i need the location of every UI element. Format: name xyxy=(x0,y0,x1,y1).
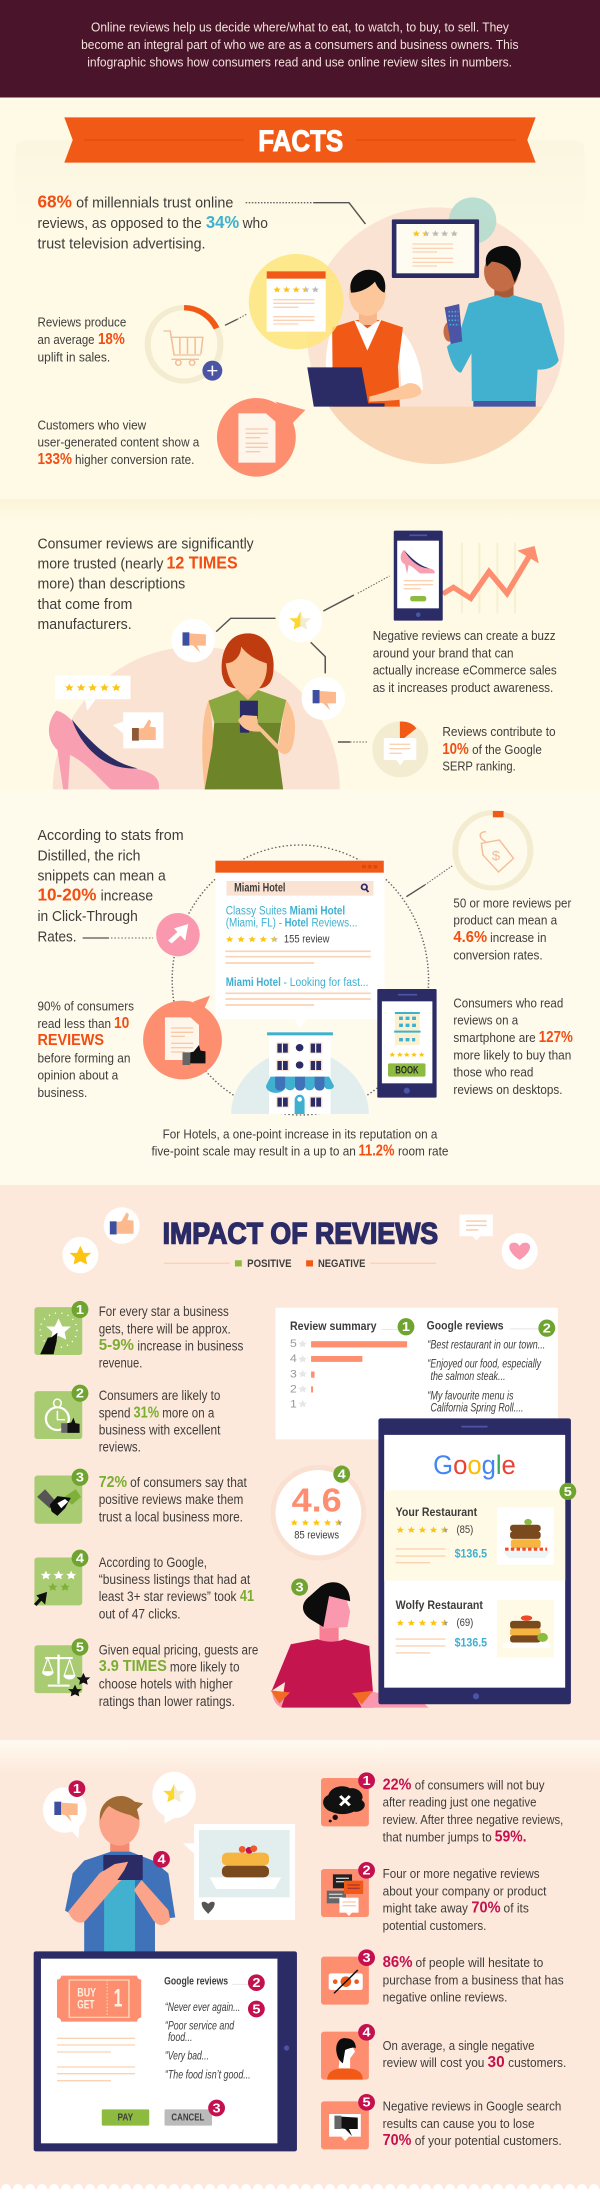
button: cancel: 3 xyxy=(213,2101,221,2115)
bubble: thumbs down: 1 xyxy=(73,1782,81,1796)
coupon: BUY xyxy=(77,1986,96,1999)
item 3: trust local business: of consumers say that xyxy=(130,1476,247,1491)
stat: 133% conversion: higher conversion rate. xyxy=(75,453,194,468)
stat: 11.2% hotels xyxy=(152,1127,448,1159)
stat: 18% uplift: Reviews produce xyxy=(37,316,126,330)
google reviews quotes: the salmon steak... xyxy=(430,1368,505,1383)
connector xyxy=(225,319,237,325)
item 5: 70% potential customers: 70% xyxy=(383,2132,412,2149)
item 4: star listings clicks: 4 xyxy=(76,1550,84,1565)
item 2: spend more: business with excellent xyxy=(99,1423,220,1438)
item 3: trust local business xyxy=(34,1469,247,1525)
stat: 127% smartphone: smartphone are xyxy=(453,1031,536,1046)
section: impact of reviews xyxy=(34,1207,576,1710)
stat: 11.2% hotels: five-point scale may result in a up to an xyxy=(152,1145,356,1159)
scalloped bottom edge xyxy=(0,2180,600,2193)
browser: search results: Hotel xyxy=(285,916,308,929)
item 4: star listings clicks: “business listings that had at xyxy=(99,1573,250,1588)
stat: 133% conversion: user-generated content show a xyxy=(37,436,199,450)
icon: thumbs up xyxy=(104,1207,140,1244)
illustration: woman xyxy=(271,1578,429,1708)
item 4: star listings clicks: 41 xyxy=(240,1587,254,1605)
item 2: four or more negative reviews: of its xyxy=(504,1902,529,1916)
item 1: star rating revenue: 5-9% xyxy=(99,1336,134,1354)
heading: impact of reviews: IMPACT OF REVIEWS xyxy=(163,1217,438,1250)
banner: facts xyxy=(64,117,536,163)
stat: 10-20% click through: increase xyxy=(101,888,153,904)
item 4: 30 customers: 30 xyxy=(487,2054,505,2071)
stat: 90% read 10 reviews: before forming an xyxy=(37,1051,130,1066)
reviews list: “Very bad... xyxy=(165,2049,209,2062)
stat: 90% read 10 reviews xyxy=(37,1000,134,1101)
stat: 127% smartphone: reviews on a xyxy=(453,1014,518,1028)
legend xyxy=(164,1256,436,1270)
stat: 68% millennials: reviews, as opposed to the xyxy=(37,215,202,232)
section background: reviews trust xyxy=(0,499,600,521)
browser: search results: Miami Hotel xyxy=(234,881,285,894)
item 5: 70% potential customers xyxy=(321,2094,562,2149)
stat: 10-20% click through: Distilled, the rich xyxy=(37,847,140,864)
stat: 18% uplift: 18% xyxy=(98,331,125,348)
reviews list: “Poor service and xyxy=(165,2019,235,2032)
item 5: equal pricing: more likely to xyxy=(170,1660,240,1675)
stat: 90% read 10 reviews: 10 xyxy=(114,1015,129,1032)
stat: 10-20% click through: snippets can mean a xyxy=(37,868,166,884)
connectors xyxy=(216,618,325,673)
icon: star xyxy=(62,1237,98,1273)
item 3: 86% hesitate: negative online reviews. xyxy=(383,1991,507,2005)
icon: phone with book button xyxy=(377,989,437,1098)
stat: 18% uplift: uplift in sales. xyxy=(37,350,110,365)
google reviews quotes: “Enjoyed our food, especially xyxy=(427,1356,542,1371)
item 1: star rating revenue xyxy=(34,1301,243,1372)
stat: 10-20% click through: in Click-Through xyxy=(37,908,138,925)
google reviews quotes xyxy=(427,1318,555,1414)
stat: 68% millennials: of millennials trust online xyxy=(76,194,233,211)
stat: 127% smartphone: Consumers who read xyxy=(453,996,563,1011)
button: pay: PAY xyxy=(117,2112,133,2123)
rating badge 4.6: 4.6 xyxy=(292,1481,342,1519)
reviews list: 5 xyxy=(252,2002,261,2016)
text: 12 times more trusted: manufacturers. xyxy=(37,616,132,633)
section background: impact of reviews xyxy=(0,1185,600,1740)
text: negative reviews buzz xyxy=(373,629,557,696)
legend: NEGATIVE xyxy=(318,1256,365,1270)
item 2: spend more xyxy=(34,1385,220,1456)
item 3: trust local business: 3 xyxy=(76,1469,84,1485)
result: your restaurant: $136.5 xyxy=(455,1546,487,1560)
item 1: star rating revenue: gets, there will be approx. xyxy=(99,1322,231,1337)
connector xyxy=(83,936,109,940)
stat: 4.6% conversion xyxy=(453,896,571,963)
browser: search results: Miami Hotel xyxy=(226,975,281,989)
reviews list xyxy=(164,1974,265,2081)
item 3: 86% hesitate xyxy=(321,1949,564,2005)
item 2: four or more negative reviews: 70% xyxy=(471,1900,501,1916)
stat: 133% conversion: Customers who view xyxy=(37,418,147,433)
stat: 4.6% conversion: 4.6% xyxy=(453,929,487,946)
result: wolfy restaurant: (69) xyxy=(457,1617,473,1629)
reviews list: Google reviews xyxy=(164,1974,228,1987)
google reviews quotes: Google reviews xyxy=(427,1318,504,1332)
button: pay xyxy=(102,2109,149,2126)
item 2: spend more: more on a xyxy=(162,1406,215,1421)
tablet: google results: 5 xyxy=(564,1484,572,1499)
item 3: 86% hesitate: 3 xyxy=(363,1951,371,1965)
text: 12 times more trusted: that come from xyxy=(37,596,132,613)
item 5: equal pricing: 3.9 TIMES xyxy=(99,1657,167,1675)
stat: 127% smartphone: those who read xyxy=(453,1066,533,1080)
woman xyxy=(202,633,295,789)
man with laptop xyxy=(307,270,423,407)
icon: shopping cart ring xyxy=(148,308,222,381)
button: cancel xyxy=(165,2100,225,2126)
item 2: four or more negative reviews: 2 xyxy=(363,1864,371,1877)
stat: 90% read 10 reviews: opinion about a xyxy=(37,1069,118,1083)
item 5: equal pricing: choose hotels with higher xyxy=(99,1677,233,1692)
item 1: star rating revenue: 1 xyxy=(76,1302,84,1317)
item 5: 70% potential customers: of your potential customers. xyxy=(415,2134,562,2149)
stat: 127% smartphone: 127% xyxy=(539,1029,573,1046)
item 2: spend more: 2 xyxy=(76,1385,84,1401)
review summary bars: 1 xyxy=(402,1319,410,1334)
section: negative reviews xyxy=(34,1772,566,2151)
button: cancel: CANCEL xyxy=(171,2112,205,2123)
stat: 10-20% click through xyxy=(37,827,184,945)
stat: 68% millennials: 34% xyxy=(206,212,239,233)
monitor xyxy=(392,219,479,278)
icon: SERP pie xyxy=(372,721,428,777)
item 2: four or more negative reviews: might take away xyxy=(383,1902,469,1916)
item 1: star rating revenue: revenue. xyxy=(99,1356,142,1372)
text: 12 times more trusted: Consumer reviews are significantly xyxy=(37,535,255,552)
result: your restaurant: Your Restaurant xyxy=(396,1505,478,1519)
stat: 10% SERP xyxy=(442,725,556,774)
gradient top of negative section xyxy=(0,1740,600,1774)
icon: half star circle xyxy=(279,599,322,642)
browser: search results: Miami Hotel xyxy=(290,903,345,917)
reviews list: “Never ever again... xyxy=(165,2000,240,2014)
reviews list: “The food isn’t good... xyxy=(165,2067,251,2081)
google reviews quotes: 2 xyxy=(543,1320,551,1335)
item 4: star listings clicks: According to Google, xyxy=(99,1555,207,1571)
item 1: 22% of consumers: 22% xyxy=(383,1776,412,1793)
item 5: equal pricing xyxy=(34,1638,258,1710)
icon: heart xyxy=(502,1233,538,1270)
legend: POSITIVE xyxy=(247,1256,292,1270)
item 3: trust local business: 72% xyxy=(99,1473,127,1491)
stat: 133% conversion: 133% xyxy=(37,451,72,468)
rating badge 4.6 xyxy=(271,1465,366,1561)
item 2: four or more negative reviews: about your company or product xyxy=(383,1884,546,1899)
review summary bars: 5 xyxy=(290,1338,297,1350)
item 5: equal pricing: 5 xyxy=(76,1639,84,1654)
item 4: 30 customers xyxy=(321,2024,566,2080)
icon: price tag ring: $ xyxy=(492,849,501,863)
item 5: equal pricing: Given equal pricing, guests are xyxy=(99,1643,258,1658)
illustration: man with tablet: 4 xyxy=(157,1853,166,1866)
connector xyxy=(406,885,425,897)
item 2: spend more: spend xyxy=(99,1406,130,1421)
stat: 10% SERP: of the Google xyxy=(472,743,542,758)
text: 12 times more trusted: more trusted (nearly xyxy=(37,555,164,572)
illustration: woman with shoe xyxy=(49,599,345,789)
stat: 18% uplift xyxy=(37,316,126,365)
item 5: 70% potential customers: results can cause you to lose xyxy=(383,2117,535,2132)
stat: 10% SERP: Reviews contribute to xyxy=(442,725,556,740)
result: wolfy restaurant: $136.5 xyxy=(455,1635,487,1649)
review summary bars: Review summary xyxy=(290,1319,377,1333)
item 1: star rating revenue: For every star a business xyxy=(99,1305,229,1320)
connector xyxy=(338,739,350,744)
result: wolfy restaurant xyxy=(396,1598,554,1657)
browser: search results xyxy=(215,860,385,1028)
stat: 4.6% conversion: product can mean a xyxy=(453,914,557,928)
item 2: spend more: reviews. xyxy=(99,1440,141,1456)
item 1: 22% of consumers: 59%. xyxy=(495,1828,527,1845)
stat: 10-20% click through: Rates. xyxy=(37,928,77,945)
header band xyxy=(0,0,600,98)
stat: 90% read 10 reviews: 90% of consumers xyxy=(37,1000,134,1014)
dotted ring xyxy=(172,845,429,1115)
icon: phone with shoe xyxy=(394,531,443,621)
item 1: 22% of consumers: of consumers will not buy xyxy=(415,1778,545,1793)
stat: 4.6% conversion: conversion rates. xyxy=(453,948,543,963)
bubble: thumbs up xyxy=(113,712,163,748)
icon: document bubble xyxy=(217,398,305,477)
stat: 10% SERP: 10% xyxy=(442,741,469,758)
icon: price tag ring xyxy=(455,811,530,888)
browser: search results: (Miami, FL) - xyxy=(226,916,282,929)
stat: 11.2% hotels: 11.2% xyxy=(359,1143,395,1159)
item 4: star listings clicks: out of 47 clicks. xyxy=(99,1607,181,1622)
illustration: man with tablet xyxy=(65,1796,175,1952)
review summary bars: 2 xyxy=(290,1383,297,1395)
intro text xyxy=(81,21,518,70)
item 2: spend more: 31% xyxy=(134,1403,159,1421)
browser: search results: 155 review xyxy=(284,934,330,945)
item 1: 22% of consumers: after reading just one negative xyxy=(383,1796,536,1810)
stat: 11.2% hotels: For Hotels, a one-point increase in its reputation on a xyxy=(163,1127,437,1142)
heading: facts: FACTS xyxy=(258,124,343,158)
shoe xyxy=(49,711,159,789)
item 2: spend more: Consumers are likely to xyxy=(99,1389,220,1404)
illustration: woman: 3 xyxy=(296,1579,304,1594)
stat: 10-20% click through: 10-20% xyxy=(37,885,96,905)
illustration: hotel building xyxy=(231,1032,369,1114)
result: your restaurant xyxy=(384,1490,565,1581)
item 4: star listings clicks xyxy=(34,1550,254,1622)
reviews list: food... xyxy=(168,2030,192,2044)
review summary bars: 1 xyxy=(290,1398,297,1411)
icon: pink arrow circle xyxy=(156,913,200,956)
review summary bars xyxy=(290,1318,414,1411)
reviews list: 2 xyxy=(252,1976,261,1990)
text: 12 times more trusted xyxy=(37,535,255,633)
text: negative reviews buzz: around your brand that can xyxy=(373,646,514,661)
bubble: five stars xyxy=(55,676,130,711)
item 4: 30 customers: customers. xyxy=(508,2056,566,2071)
icon: phone with book button: BOOK xyxy=(395,1063,419,1076)
item 3: 86% hesitate: 86% xyxy=(383,1954,413,1971)
stat: 68% millennials: who xyxy=(242,215,268,232)
stat: 11.2% hotels: room rate xyxy=(398,1145,448,1159)
rating badge 4.6: 85 reviews xyxy=(294,1529,339,1541)
coupon: 1 xyxy=(114,1983,122,2012)
item 3: 86% hesitate: of people will hesitate to xyxy=(416,1956,543,1971)
section: consumer reviews trust xyxy=(37,531,557,789)
item 2: four or more negative reviews xyxy=(321,1862,546,1934)
item 5: equal pricing: ratings than lower ratings. xyxy=(99,1695,235,1710)
man with phone xyxy=(443,246,559,407)
item 1: star rating revenue: increase in business xyxy=(137,1339,243,1354)
bubble: half star xyxy=(152,1772,196,1823)
item 1: 22% of consumers: 1 xyxy=(363,1774,371,1788)
panel: review summary and google reviews xyxy=(276,1308,558,1439)
review summary bars: 3 xyxy=(290,1368,297,1380)
item 3: trust local business: positive reviews make them xyxy=(99,1493,243,1508)
section background: negative xyxy=(0,1740,600,2190)
item 2: four or more negative reviews: potential customers. xyxy=(383,1919,486,1934)
section: facts xyxy=(15,21,585,477)
stat: 10% SERP: SERP ranking. xyxy=(442,760,516,774)
item 3: trust local business: trust a local business more. xyxy=(99,1510,243,1525)
stat: 68% millennials xyxy=(37,192,268,252)
result: your restaurant: (85) xyxy=(457,1524,473,1536)
stat: 68% millennials: trust television advertising. xyxy=(37,235,205,252)
connector xyxy=(246,201,314,205)
stat: 133% conversion xyxy=(37,418,199,468)
coupon: GET xyxy=(77,1997,95,2011)
item 4: 30 customers: review will cost you xyxy=(383,2056,484,2071)
stat: 4.6% conversion: increase in xyxy=(490,931,546,946)
tablet: google results xyxy=(378,1418,576,1704)
google reviews quotes: “My favourite menu is xyxy=(427,1388,514,1402)
item 4: 30 customers: On average, a single negative xyxy=(383,2039,535,2054)
browser: search results: Classy Suites xyxy=(226,903,287,917)
photo card with food xyxy=(183,1824,295,1920)
result: wolfy restaurant: Wolfy Restaurant xyxy=(396,1598,483,1612)
browser: search results: - Looking for fast... xyxy=(284,975,368,989)
google logo text: Google xyxy=(433,1450,516,1480)
item 1: 22% of consumers xyxy=(321,1772,563,1845)
stat: 127% smartphone: reviews on desktops. xyxy=(453,1083,562,1098)
panel behind banner xyxy=(15,140,585,240)
stat: 127% smartphone xyxy=(453,996,573,1098)
item 4: star listings clicks: least 3+ star reviews” took xyxy=(99,1590,237,1605)
stat: 10-20% click through: According to stats from xyxy=(37,827,184,844)
bubble: thumbs down xyxy=(43,1780,86,1838)
icon: document thumbs up bubble xyxy=(143,996,222,1079)
icon: message xyxy=(460,1214,493,1241)
tablet: coupon and reviews xyxy=(34,1951,297,2151)
illustration: two men xyxy=(307,197,564,464)
item 1: 22% of consumers: that number jumps to xyxy=(383,1830,492,1845)
stat: 90% read 10 reviews: REVIEWS xyxy=(37,1032,104,1049)
rating badge 4.6: 4 xyxy=(338,1466,346,1481)
connector xyxy=(323,595,354,611)
text: 12 times more trusted: more) than descriptions xyxy=(37,576,185,592)
item 4: 30 customers: 4 xyxy=(363,2026,371,2039)
section background: snippets xyxy=(0,789,600,1185)
stat: 90% read 10 reviews: business. xyxy=(37,1086,87,1101)
stat: 18% uplift: an average xyxy=(37,333,95,348)
text: 12 times more trusted: 12 TIMES xyxy=(166,553,238,573)
chart: rising zigzag arrow xyxy=(443,543,539,613)
review summary bars: 4 xyxy=(290,1353,297,1365)
google reviews quotes: California Spring Roll.... xyxy=(430,1400,523,1414)
browser: search results: Reviews... xyxy=(311,916,357,929)
icon: thumbs down left xyxy=(171,619,215,662)
coupon xyxy=(57,1976,141,2022)
section: snippets and hotels xyxy=(37,811,573,1159)
item 5: 70% potential customers: 5 xyxy=(363,2096,371,2109)
stat: 68% millennials: 68% xyxy=(37,192,72,212)
window card with yellow circle xyxy=(249,254,344,349)
item 2: four or more negative reviews: Four or more negative reviews xyxy=(383,1867,540,1882)
stat: 90% read 10 reviews: read less than xyxy=(37,1017,111,1032)
icon: thumbs down right xyxy=(302,677,345,720)
